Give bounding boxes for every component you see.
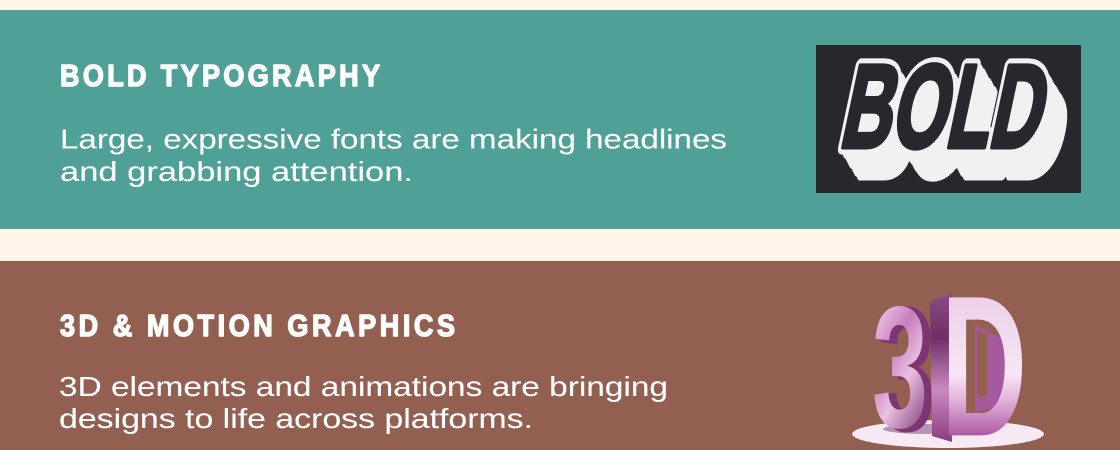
text block: bold typography description: Large, expressive fonts are making headlines xyxy=(60,124,727,154)
icon: bold lettering image xyxy=(816,41,1081,201)
heading: bold typography: BOLD TYPOGRAPHY xyxy=(60,59,380,93)
text block: 3d and motion graphics description: 3D elements and animations are bringing xyxy=(59,371,668,402)
text block: 3d and motion graphics description xyxy=(59,371,668,434)
text block: 3d and motion graphics description: designs to life across platforms. xyxy=(59,403,533,434)
text block: bold typography description: and grabbing attention. xyxy=(60,156,413,187)
heading: 3d and motion graphics: 3D & MOTION GRAPHICS xyxy=(60,309,455,343)
icon: 3d metallic lettering xyxy=(852,292,1044,450)
panel: 3d and motion graphics xyxy=(0,261,1120,450)
panel: bold typography xyxy=(0,10,1120,229)
text block: bold typography description xyxy=(60,124,727,187)
